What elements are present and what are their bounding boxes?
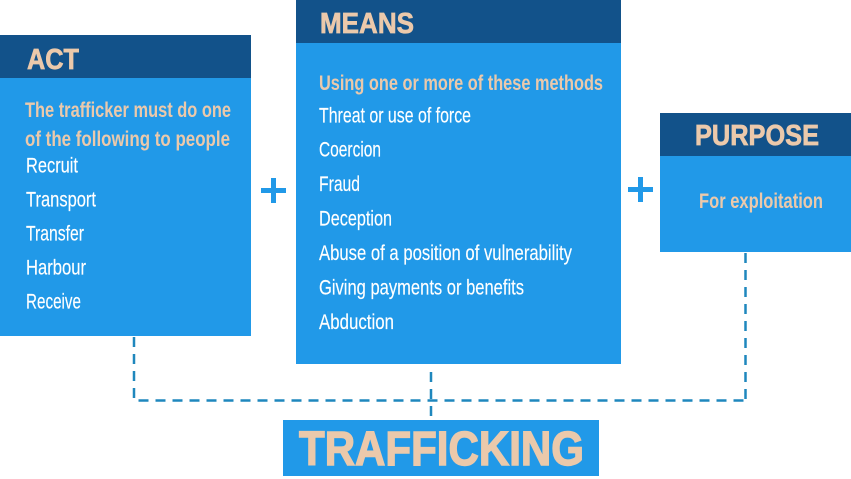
means header bar	[296, 0, 621, 43]
act list: Transfer	[26, 222, 84, 246]
icon: plus	[261, 178, 286, 203]
panel: means	[296, 0, 621, 364]
means list: Threat or use of force	[319, 104, 471, 128]
trafficking heading: TRAFFICKING	[299, 423, 584, 476]
act list: Harbour	[26, 256, 86, 280]
icon: plus	[628, 177, 653, 202]
means intro: Using one or more of these methods	[319, 72, 603, 95]
act intro: of the following to people	[25, 128, 230, 151]
panel: trafficking result	[283, 420, 599, 476]
purpose heading: PURPOSE	[695, 120, 819, 152]
act heading: ACT	[27, 44, 80, 76]
connector lines	[134, 253, 746, 420]
act list: Receive	[26, 290, 81, 314]
means list: Giving payments or benefits	[319, 276, 524, 300]
act intro: The trafficker must do one	[25, 99, 231, 122]
means list: Deception	[319, 208, 392, 230]
act header bar	[0, 35, 251, 78]
means list	[319, 104, 572, 334]
means list: Abuse of a position of vulnerability	[319, 242, 572, 265]
act list	[26, 154, 96, 314]
act intro	[25, 99, 231, 151]
act list: Recruit	[26, 154, 78, 178]
panel: purpose	[660, 113, 851, 252]
means list: Abduction	[319, 311, 394, 334]
means list: Fraud	[319, 173, 360, 196]
panel: act	[0, 35, 251, 336]
act list: Transport	[26, 188, 96, 212]
purpose header bar	[660, 113, 851, 156]
means list: Coercion	[319, 138, 381, 162]
means heading: MEANS	[320, 8, 414, 40]
